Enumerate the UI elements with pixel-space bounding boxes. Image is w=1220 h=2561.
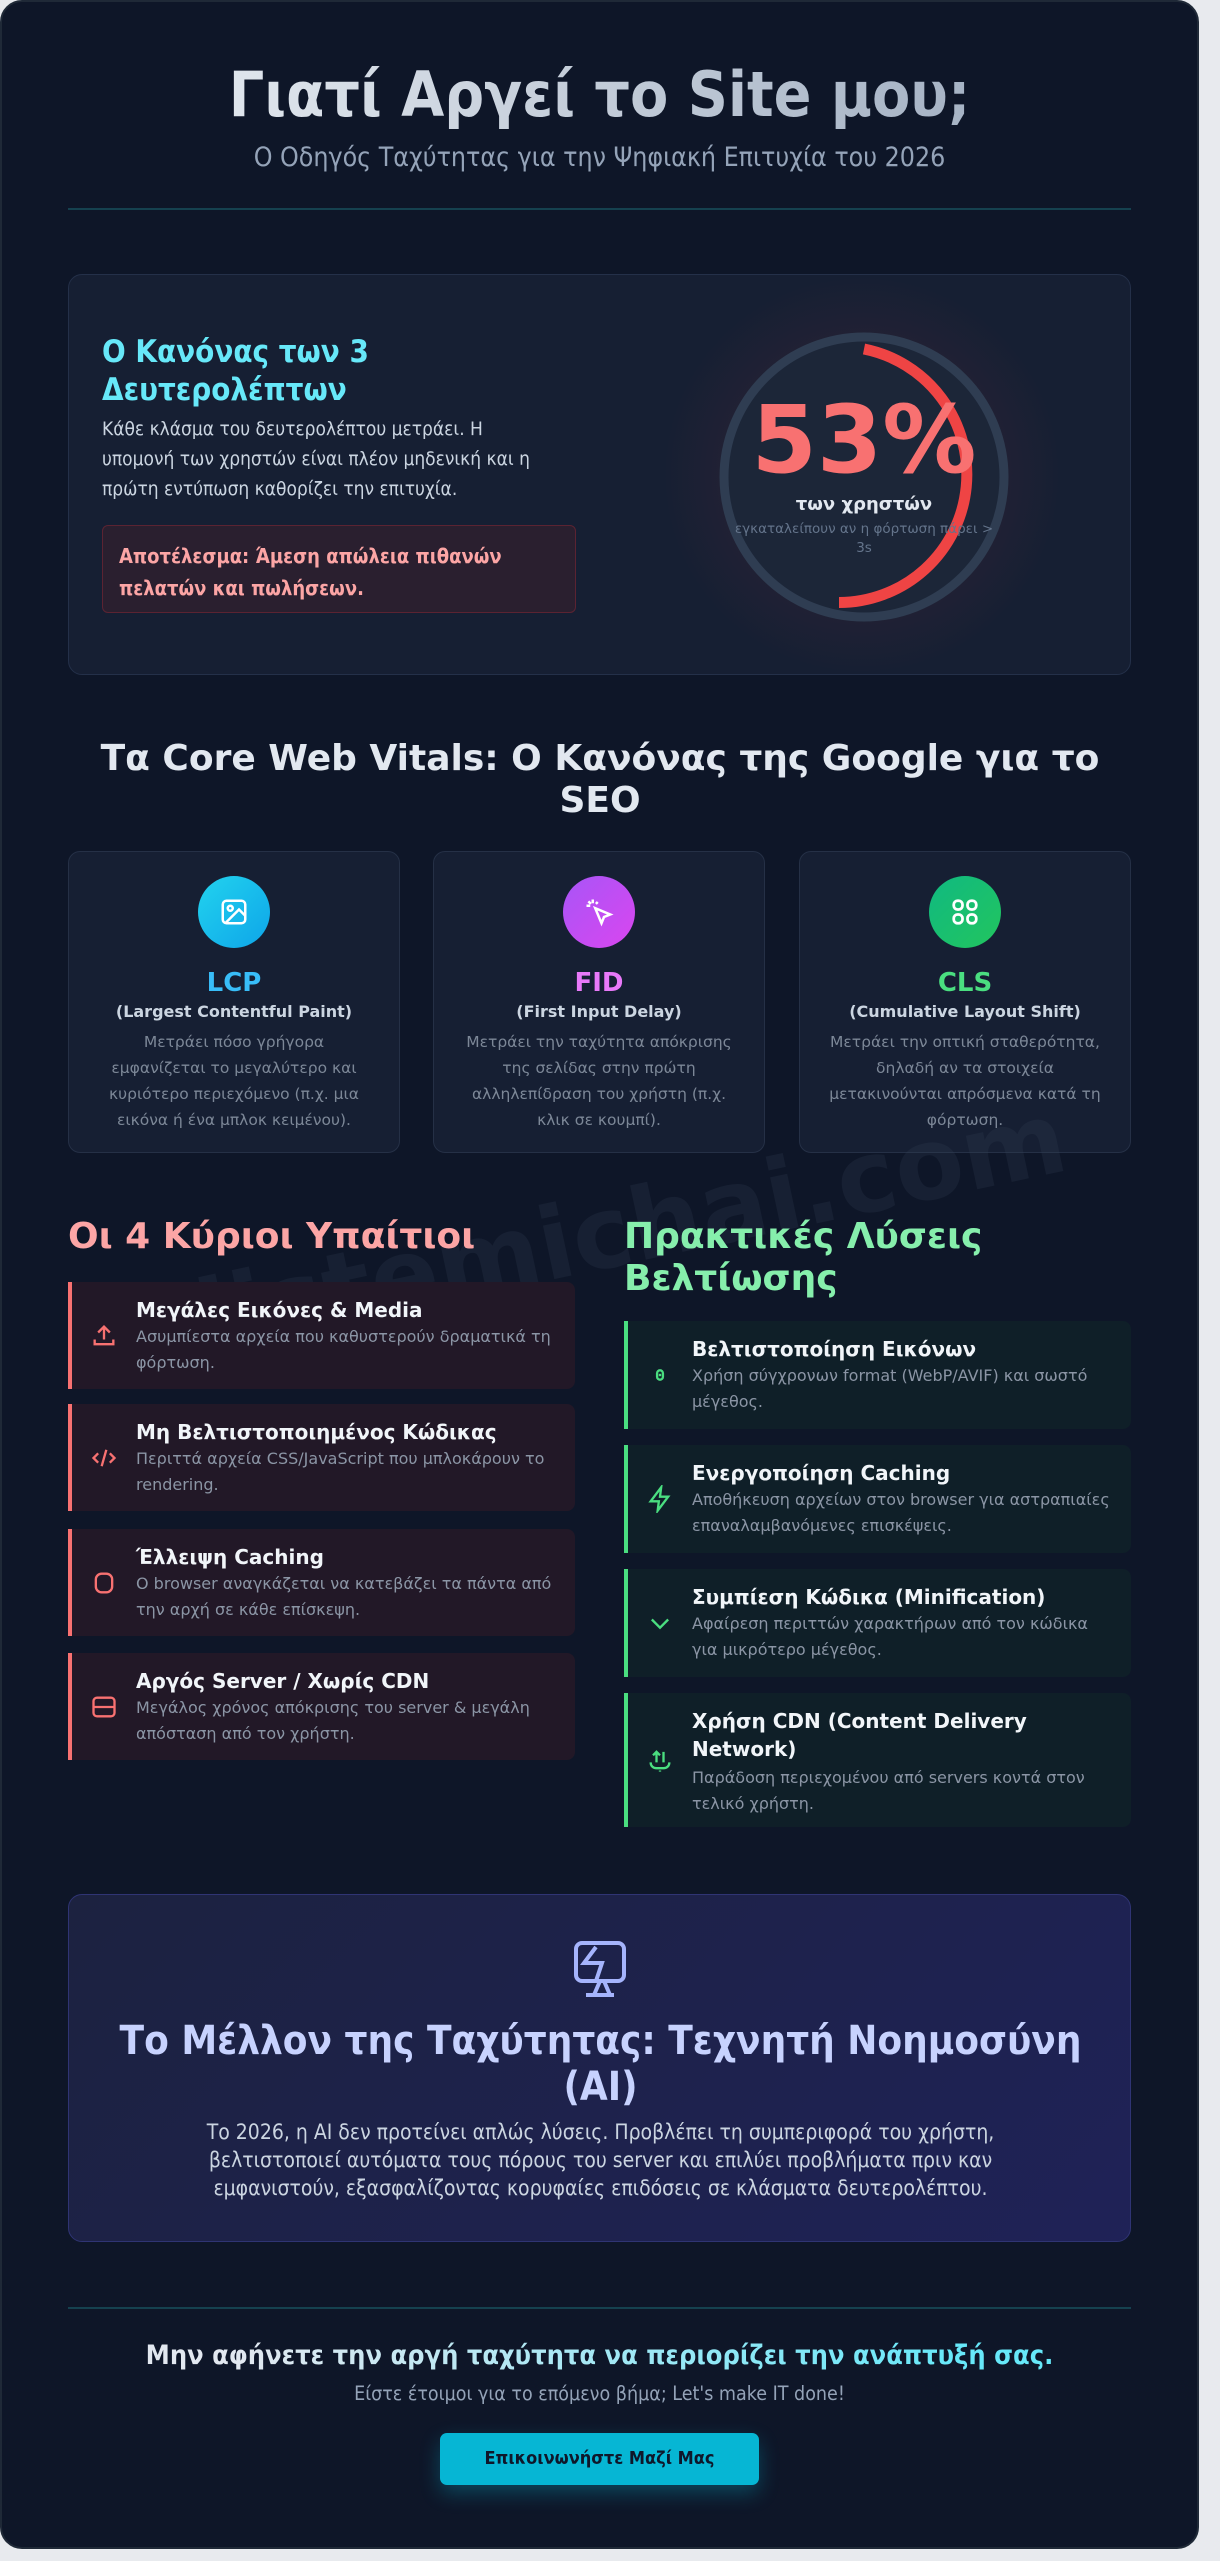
solution 2: Αποθήκευση αρχείων στον browser για αστραπιαίες επαναλαμβανόμενες επισκέψεις. bbox=[692, 1490, 1110, 1535]
watermark: distemichai.com bbox=[150, 1078, 1076, 1384]
cause 1: Μεγάλες Εικόνες & Media bbox=[136, 1298, 423, 1322]
icon: image bbox=[198, 876, 270, 948]
card: LCP: (Largest Contentful Paint) bbox=[116, 1002, 352, 1021]
solution 3: Συμπίεση Κώδικα (Minification) bbox=[692, 1585, 1045, 1609]
callout: result bbox=[102, 525, 576, 613]
title: Γιατί Αργεί το Site μου; bbox=[229, 58, 970, 131]
icon: AI monitor bbox=[574, 1941, 626, 1997]
card: CLS: CLS bbox=[938, 968, 992, 998]
CTA subtext: Είστε έτοιμοι για το επόμενο βήμα; Let's make IT done! bbox=[354, 2382, 845, 2405]
callout: result: Αποτέλεσμα: Άμεση απώλεια πιθανών πελατών και πωλήσεων. bbox=[119, 544, 502, 600]
CTA button: Επικοινωνήστε Μαζί Μας bbox=[484, 2448, 714, 2469]
card: FID: (First Input Delay) bbox=[516, 1002, 682, 1021]
solution 2: Ενεργοποίηση Caching bbox=[692, 1461, 950, 1485]
solution 1: Χρήση σύγχρονων format (WebP/AVIF) και σωστό μέγεθος. bbox=[692, 1366, 1087, 1411]
chart: 53% ring: εγκαταλείπουν αν η φόρτωση πάρει > bbox=[735, 521, 993, 537]
solution 3 bbox=[624, 1569, 1131, 1677]
solution 4: Χρήση CDN (Content Delivery Network) bbox=[692, 1709, 1027, 1761]
chart: 53% ring: 3s bbox=[856, 540, 872, 556]
panel: solutions list bbox=[624, 1321, 1131, 1827]
heading: 3 second rule: Ο Κανόνας των 3 Δευτερολέπτων bbox=[102, 334, 369, 408]
card: FID: Μετράει την ταχύτητα απόκρισης της σελίδας στην πρώτη αλληλεπίδραση του χρήστη (π.χ. κλικ σε κουμπί). bbox=[466, 1033, 732, 1129]
CTA heading: Μην αφήνετε την αργή ταχύτητα να περιορίζει την ανάπτυξή σας. bbox=[146, 2340, 1053, 2371]
chart: 53% ring: των χρηστών bbox=[796, 494, 932, 515]
card: CLS: Μετράει την οπτική σταθερότητα, δηλαδή αν τα στοιχεία μετακινούνται απρόσμενα κατά τη φόρτωση. bbox=[829, 1033, 1101, 1129]
cause 4: Αργός Server / Χωρίς CDN bbox=[136, 1669, 429, 1693]
cause 2 bbox=[68, 1404, 575, 1511]
solution 3: Αφαίρεση περιττών χαρακτήρων από τον κώδικα για μικρότερο μέγεθος. bbox=[692, 1614, 1088, 1659]
title bbox=[0, 58, 1199, 131]
solution 2 bbox=[624, 1445, 1131, 1553]
chart: 53% ring: 53% bbox=[752, 386, 976, 495]
card: LCP: LCP bbox=[207, 968, 261, 998]
panel: causes list bbox=[68, 1282, 575, 1760]
cause 3: Έλλειψη Caching bbox=[136, 1545, 324, 1569]
card: FID bbox=[433, 851, 765, 1153]
solution 4: Παράδοση περιεχομένου από servers κοντά στον τελικό χρήστη. bbox=[692, 1768, 1085, 1813]
cause 3: Ο browser αναγκάζεται να κατεβάζει τα πάντα από την αρχή σε κάθε επίσκεψη. bbox=[136, 1574, 551, 1619]
cause 3 bbox=[68, 1529, 575, 1636]
text block: AI: Το 2026, η AI δεν προτείνει απλώς λύσεις. Προβλέπει τη συμπεριφορά του χρήστη, βελτιστοποιεί αυτόματα τους πόρους του server και επιλύει προβλήματα πριν καν εμφανιστούν, εξασφαλίζοντας κορυφαίες επιδόσεις σε κλάσματα δευτερολέπτου. bbox=[207, 2120, 994, 2200]
icon: grid bbox=[929, 876, 1001, 948]
subtitle: Ο Οδηγός Ταχύτητας για την Ψηφιακή Επιτυχία του 2026 bbox=[254, 142, 945, 173]
cause 2: Περιττά αρχεία CSS/JavaScript που μπλοκάρουν το rendering. bbox=[136, 1449, 544, 1494]
cause 4 bbox=[68, 1653, 575, 1760]
panel: AI future bbox=[68, 1894, 1131, 2242]
heading: AI: Το Μέλλον της Ταχύτητας: Τεχνητή Νοημοσύνη (AI) bbox=[120, 2018, 1081, 2110]
card: LCP bbox=[68, 851, 400, 1153]
heading: causes: Οι 4 Κύριοι Υπαίτιοι bbox=[68, 1216, 475, 1257]
solution 4 bbox=[624, 1693, 1131, 1827]
solution 1: Βελτιστοποίηση Εικόνων bbox=[692, 1337, 976, 1361]
panel: 3-second rule bbox=[68, 274, 1131, 675]
text block: Κάθε κλάσμα του δευτερολέπτου μετράει. Η υπομονή των χρηστών είναι πλέον μηδενική και η πρώτη εντύπωση καθορίζει την επιτυχία. bbox=[102, 418, 530, 500]
cause 1: Ασυμπίεστα αρχεία που καθυστερούν δραματικά τη φόρτωση. bbox=[136, 1327, 551, 1372]
card: FID: FID bbox=[574, 968, 624, 998]
cause 1 bbox=[68, 1282, 575, 1389]
card: CLS: (Cumulative Layout Shift) bbox=[849, 1002, 1081, 1021]
card: CLS bbox=[799, 851, 1131, 1153]
heading: solutions: Πρακτικές Λύσεις Βελτίωσης bbox=[624, 1216, 982, 1299]
cause 2: Μη Βελτιστοποιημένος Κώδικας bbox=[136, 1420, 497, 1444]
card: LCP: Μετράει πόσο γρήγορα εμφανίζεται το μεγαλύτερο και κυριότερο περιεχόμενο (π.χ. μια εικόνα ή ένα μπλοκ κειμένου). bbox=[109, 1033, 359, 1129]
solution 1 bbox=[624, 1321, 1131, 1429]
heading: core web vitals: Τα Core Web Vitals: Ο Κανόνας της Google για το SEO bbox=[101, 738, 1099, 821]
cause 4: Μεγάλος χρόνος απόκρισης του server & μεγάλη απόσταση από τον χρήστη. bbox=[136, 1698, 530, 1743]
chart: 53% ring bbox=[720, 332, 1008, 622]
icon: pointer bbox=[563, 876, 635, 948]
CTA button bbox=[440, 2433, 759, 2485]
